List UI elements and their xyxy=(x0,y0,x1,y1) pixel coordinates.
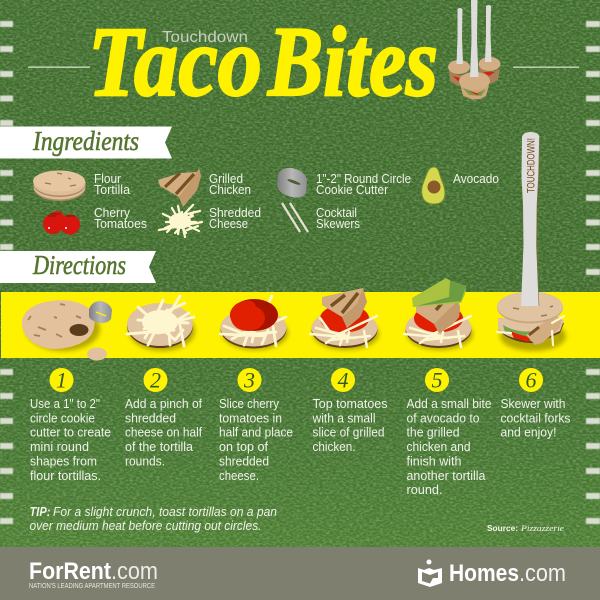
logo: ForRent.com: ForRent xyxy=(29,558,111,585)
step 1 number and text: circle cookie xyxy=(30,411,95,425)
logo: Homes.com: .com xyxy=(519,560,566,587)
step 6 number and text xyxy=(500,368,570,440)
banner: Ingredients heading xyxy=(0,126,172,158)
source credit: Source: xyxy=(487,523,518,533)
step 2 number and text: Add a pinch of xyxy=(125,397,203,411)
label: Flour Tortilla: Tortilla xyxy=(94,183,130,197)
step 2 number and text xyxy=(125,368,203,468)
step 4 number and text: chicken. xyxy=(312,440,356,454)
step 1 number and text: shapes from xyxy=(30,454,97,468)
step 5 number and text: finish with xyxy=(406,454,462,468)
step 6 number and text: Skewer with xyxy=(500,397,566,411)
logo: ForRent.com: .com xyxy=(111,558,158,585)
tip text: over medium heat before cutting out circles. xyxy=(30,519,262,533)
label: Grilled Chicken: Grilled xyxy=(209,172,243,186)
step 3 number and text xyxy=(219,368,293,483)
label: Round Circle Cookie Cutter xyxy=(316,172,411,197)
step 6 number and text: 6 xyxy=(526,368,536,392)
label: Shredded Cheese xyxy=(209,206,261,231)
step 1 number and text: flour tortillas. xyxy=(30,469,101,483)
logo: ForRent.com xyxy=(29,558,158,590)
label: Grilled Chicken xyxy=(209,172,251,197)
step 6 illustration: finished skewered bite xyxy=(497,292,566,351)
banner: Directions heading: Directions xyxy=(32,250,126,280)
step 2 number and text: cheese on half xyxy=(125,426,202,440)
banner: Ingredients heading: Ingredients xyxy=(32,126,139,156)
step 1 illustration: tortilla and cutter xyxy=(22,300,112,360)
step 4 number and text: with a small xyxy=(312,411,376,425)
logo: ForRent.com: NATION'S LEADING APARTMENT RESOURCE xyxy=(29,583,155,590)
icon: three mini taco bites on skewers xyxy=(448,0,500,100)
icon: flour tortilla stack xyxy=(33,170,86,201)
title: Bites xyxy=(267,6,438,117)
title: Taco xyxy=(88,6,262,117)
icon: large touchdown skewer xyxy=(521,132,540,306)
tip text: TIP: xyxy=(30,505,50,519)
step 3 number and text: on top of xyxy=(219,440,269,454)
step 4 number and text: 4 xyxy=(338,368,348,392)
step 5 number and text xyxy=(406,368,492,497)
icon: shredded cheese xyxy=(159,205,202,237)
icon: large touchdown skewer: TOUCHDOWN! xyxy=(526,138,538,193)
label: Grilled Chicken: Chicken xyxy=(209,183,251,197)
banner: Directions heading xyxy=(0,250,156,283)
label: Flour Tortilla: Flour xyxy=(94,172,121,186)
step 3 number and text: tomatoes in xyxy=(219,411,282,425)
icon: cherry tomatoes xyxy=(43,211,80,234)
step 2 number and text: of the tortilla xyxy=(125,440,193,454)
step 5 number and text: Add a small bite xyxy=(406,397,492,411)
step 4 number and text: Top tomatoes xyxy=(312,397,388,411)
step 1 number and text: cutter to create xyxy=(30,426,111,440)
label: Cherry Tomatoes xyxy=(94,206,147,231)
footer bar xyxy=(0,547,600,600)
title: Touchdown xyxy=(162,29,248,46)
label: Flour Tortilla xyxy=(94,172,130,197)
yellow directions band xyxy=(1,292,600,358)
icon: grilled chicken xyxy=(158,168,201,207)
step 2 number and text: rounds. xyxy=(125,454,165,468)
step 4 number and text xyxy=(312,368,388,454)
step 5 number and text: the grilled xyxy=(406,426,460,440)
step 6 number and text: and enjoy! xyxy=(500,426,556,440)
label: Cocktail Skewers: Skewers xyxy=(316,217,360,231)
icon: cocktail skewers xyxy=(282,203,308,232)
step 3 number and text: shredded xyxy=(219,454,269,468)
label: Cherry Tomatoes: Cherry xyxy=(94,206,131,220)
label: Shredded Cheese: Cheese xyxy=(209,217,248,231)
step 1 number and text xyxy=(30,368,111,483)
label: Round Circle Cookie Cutter: 1"-2" Round Circle xyxy=(316,172,411,186)
step 5 number and text: chicken and xyxy=(406,440,471,454)
step 2 number and text: 2 xyxy=(150,368,161,392)
step 3 number and text: half and place xyxy=(219,426,293,440)
logo: Homes.com: Homes xyxy=(449,560,519,587)
step 6 number and text: cocktail forks xyxy=(500,411,570,425)
label: Cocktail Skewers: Cocktail xyxy=(316,206,357,220)
icon: avocado xyxy=(422,167,445,204)
step 4 number and text: slice of grilled xyxy=(312,426,385,440)
icon: round cookie cutter xyxy=(277,168,307,198)
title xyxy=(28,6,579,117)
step 2 illustration: cheese on tortilla xyxy=(127,296,195,351)
step 1 number and text: mini round xyxy=(30,440,89,454)
step 3 number and text: Slice cherry xyxy=(219,397,280,411)
tip text xyxy=(30,505,277,533)
logo: Homes.com xyxy=(418,560,566,587)
step 5 illustration: avocado on chicken xyxy=(404,278,473,350)
step 3 number and text: 3 xyxy=(243,368,255,392)
label: Round Circle Cookie Cutter: Cookie Cutter xyxy=(316,183,388,197)
step 3 illustration: tomato on cheese xyxy=(220,296,288,350)
step 4 illustration: chicken on tomato xyxy=(310,288,379,350)
step 1 number and text: Use a 1" to 2" xyxy=(30,397,100,411)
label: Avocado: Avocado xyxy=(453,172,499,186)
step 5 number and text: another tortilla xyxy=(406,469,486,483)
step 1 number and text: 1 xyxy=(56,368,67,392)
label: Cherry Tomatoes: Tomatoes xyxy=(94,217,147,231)
step 5 number and text: of avocado to xyxy=(406,411,480,425)
step 2 number and text: shredded xyxy=(125,411,176,425)
tip text: For a slight crunch, toast tortillas on a pan xyxy=(53,505,277,519)
label: Cocktail Skewers xyxy=(316,206,360,231)
source credit xyxy=(487,523,564,533)
step 5 number and text: round. xyxy=(406,483,442,497)
step 5 number and text: 5 xyxy=(432,368,442,392)
step 3 number and text: cheese. xyxy=(219,469,259,483)
source credit: Pizzazzerie xyxy=(520,523,564,533)
label: Shredded Cheese: Shredded xyxy=(209,206,261,220)
